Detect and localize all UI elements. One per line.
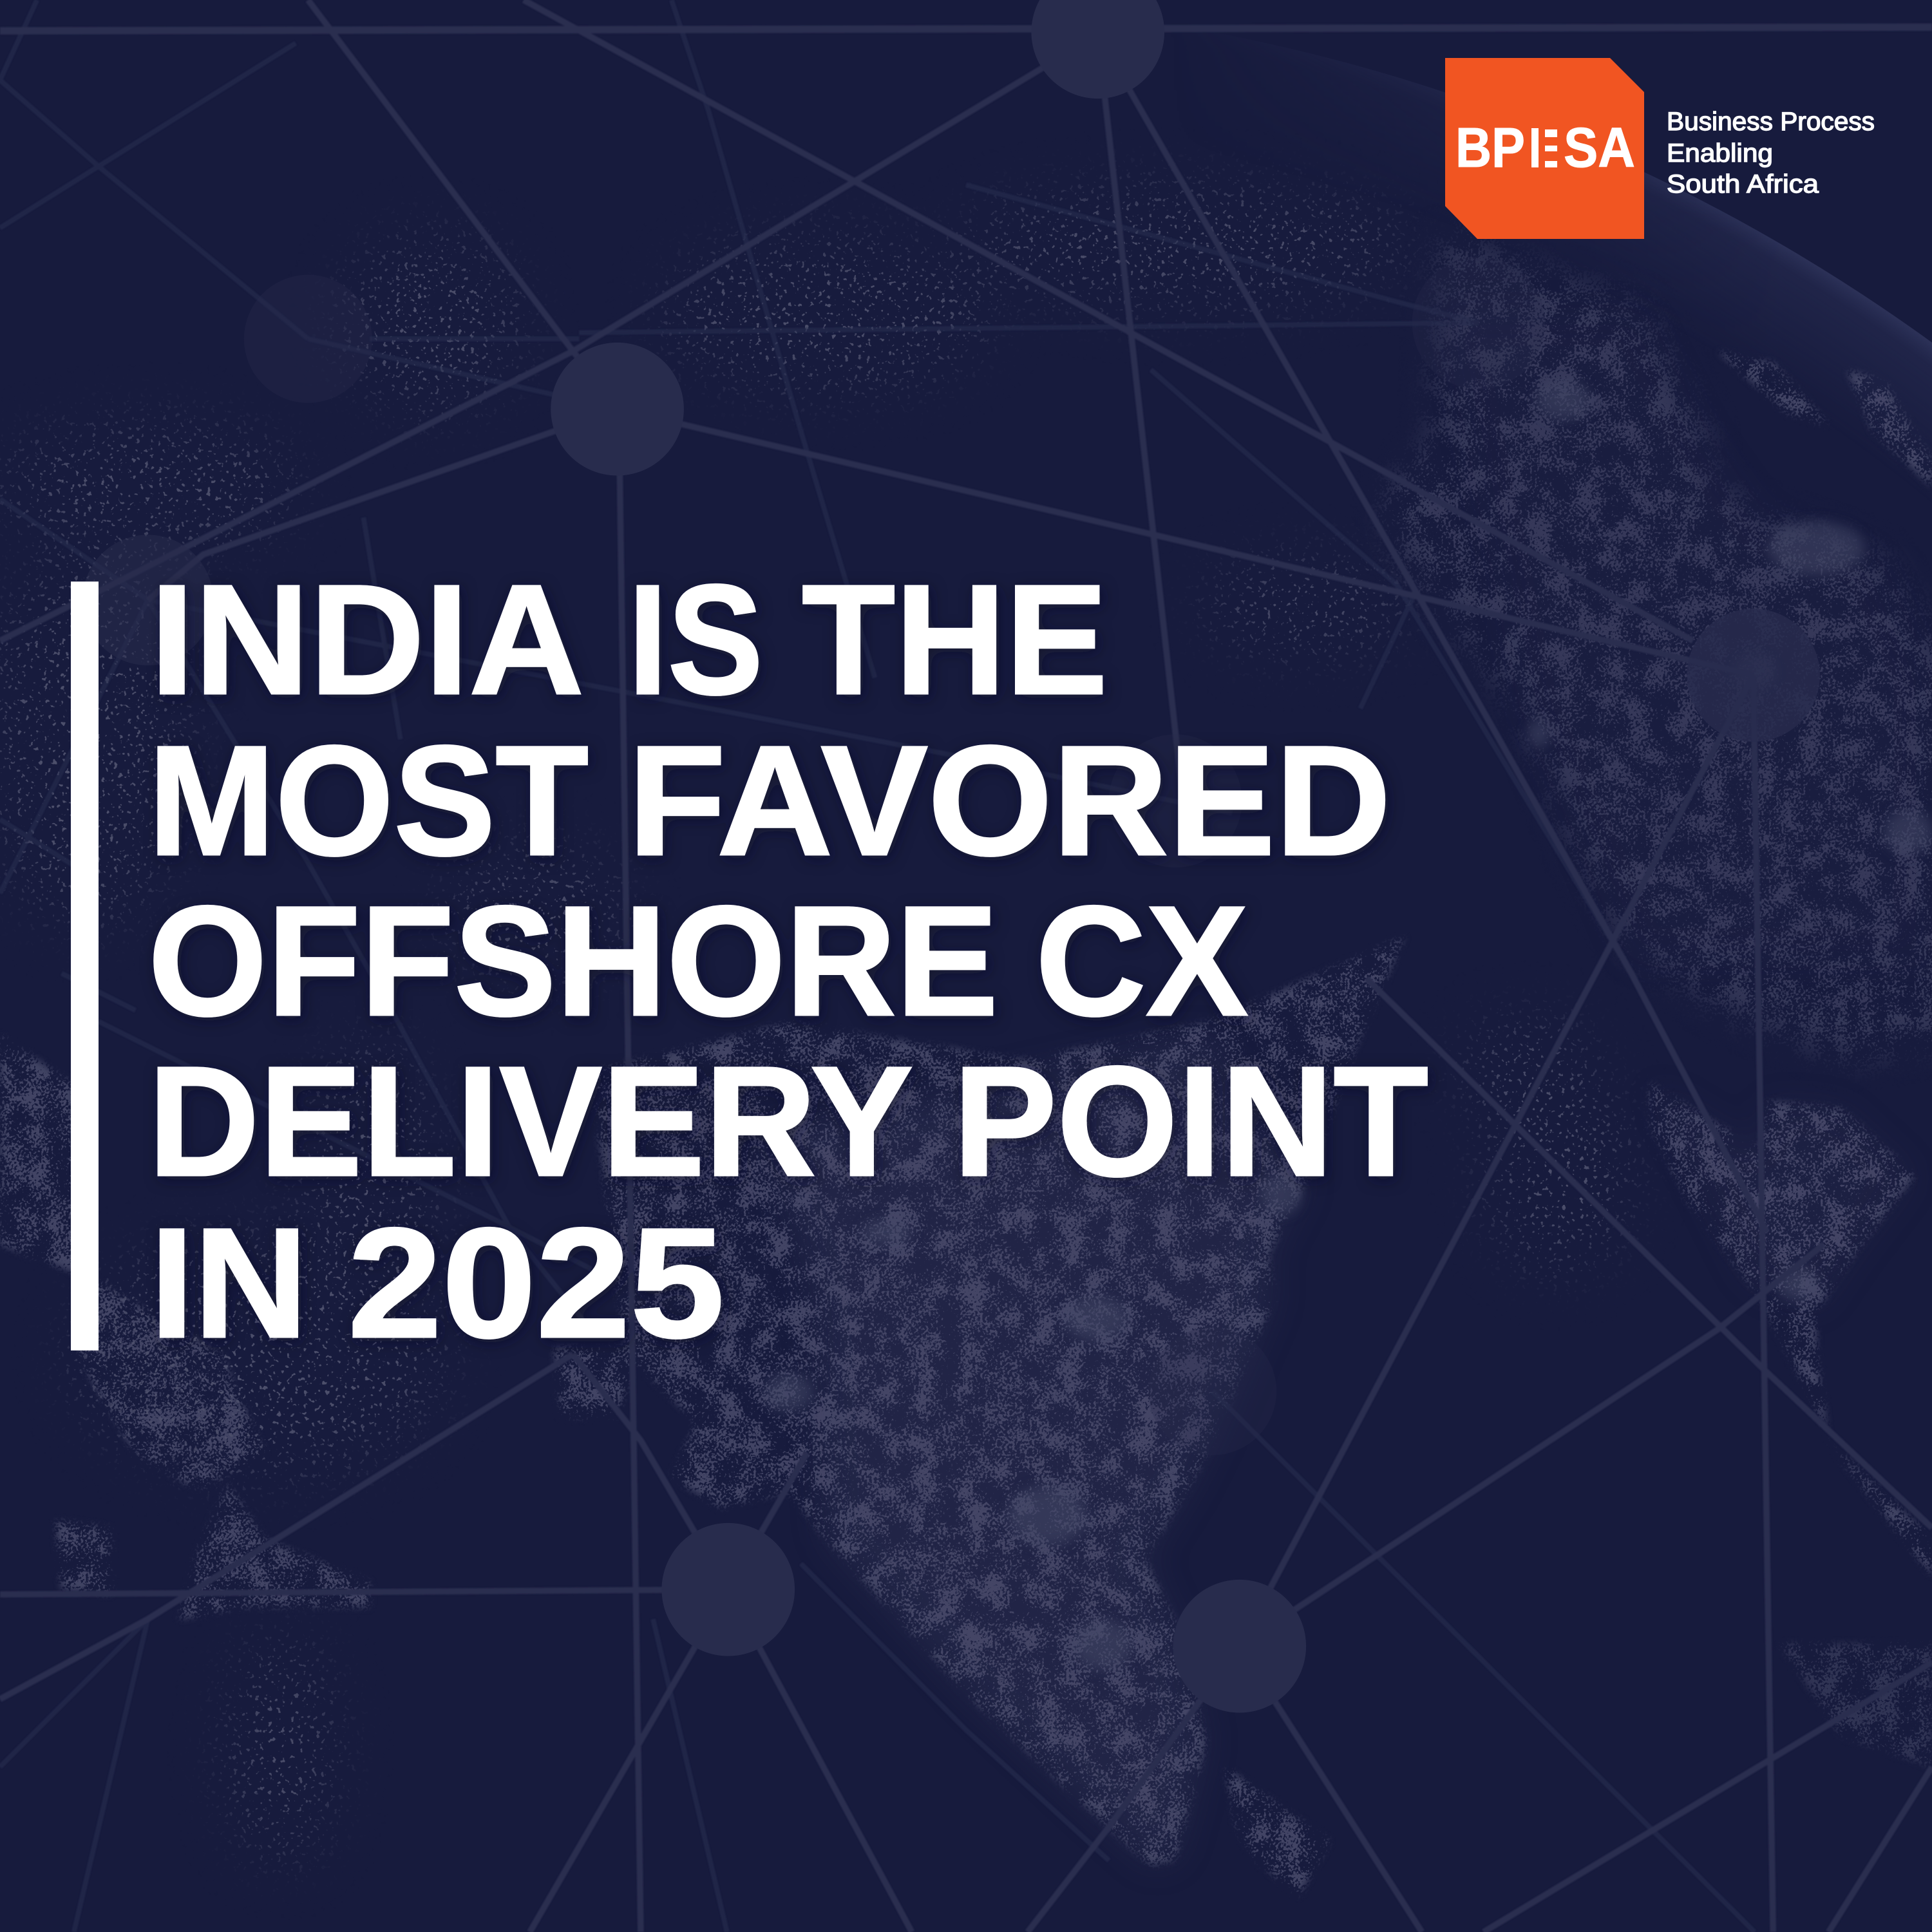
title [148, 553, 1428, 1370]
city lights: dense east asia [1385, 234, 1932, 1059]
title line 2 [148, 714, 1391, 888]
title line 3: CX [1036, 874, 1248, 1048]
title line 1 [150, 553, 1108, 727]
accent bar [71, 582, 99, 1350]
logo tagline: Business Process [1667, 108, 1875, 136]
title line 1: INDIA [150, 553, 584, 727]
logo wordmark: BP [1455, 117, 1525, 179]
title line 2: FAVORED [628, 714, 1391, 888]
logo tagline [1667, 108, 1875, 198]
title line 4: DELIVERY [148, 1034, 913, 1209]
logo wordmark: SA [1564, 117, 1635, 179]
logo badge [1445, 58, 1644, 239]
title line 5: IN [150, 1196, 308, 1370]
logo tagline: Enabling [1667, 139, 1773, 167]
title line 4: POINT [953, 1034, 1428, 1209]
logo: BPESA [1445, 58, 1875, 239]
city lights: sparse [0, 191, 1627, 1861]
network nodes [82, 0, 1820, 1712]
title line 5: 2025 [348, 1196, 724, 1370]
logo wordmark [1455, 117, 1635, 179]
title line 1: IS [628, 553, 763, 727]
land glow [764, 308, 1932, 1866]
logo tagline: South Africa [1667, 170, 1819, 198]
title line 4 [148, 1034, 1428, 1209]
globe limb [1386, 74, 1932, 412]
title line 3: OFFSHORE [148, 874, 998, 1048]
title line 1: THE [802, 553, 1108, 727]
bright city blobs [764, 381, 1932, 1670]
title line 5 [150, 1196, 724, 1370]
city lights: dense [0, 351, 1932, 1897]
title line 2: MOST [148, 714, 589, 888]
